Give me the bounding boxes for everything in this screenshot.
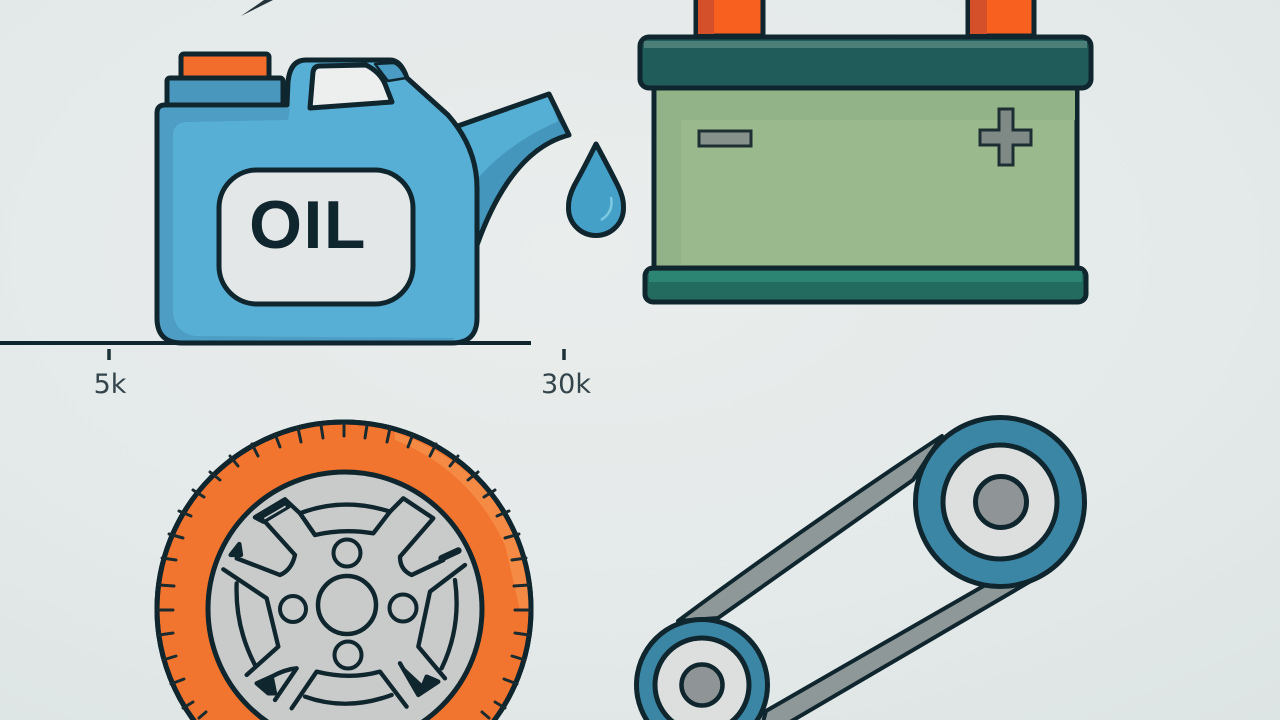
tire outline and tread marks: [157, 422, 531, 720]
battery lid: [640, 37, 1091, 88]
can body outline: [157, 60, 477, 343]
icon: oil can: [157, 54, 569, 343]
rim: [208, 472, 482, 720]
icon: belt and pulleys: [636, 418, 1084, 720]
small pulley: [636, 620, 768, 720]
large pulley: [916, 418, 1084, 586]
can body shading: [159, 108, 455, 342]
battery case: [654, 85, 1077, 270]
stray pen stroke at top: [241, 0, 273, 16]
hub: [318, 576, 376, 634]
belt lower run: [763, 578, 1036, 720]
can body: [157, 60, 477, 343]
plus symbol: [980, 109, 1031, 165]
spokes and windows: [223, 498, 465, 708]
handle tab: [375, 63, 406, 81]
minus symbol: [699, 131, 751, 146]
icon: tire and wheel: [157, 422, 531, 720]
oil label: [219, 170, 413, 304]
icon: car battery: [640, 0, 1091, 302]
battery terminals: [696, 0, 1034, 36]
label: 30k: 30k: [541, 369, 591, 400]
belt upper run: [678, 436, 942, 621]
label: 5k: 5k: [94, 369, 127, 400]
timeline axis with mileage ticks: [0, 343, 591, 400]
can cap: [167, 54, 283, 105]
can handle opening: [310, 65, 392, 108]
can spout: [455, 94, 569, 245]
icon: oil drop: [568, 144, 624, 236]
tire: [157, 422, 531, 720]
bolt holes: [280, 540, 416, 668]
tire highlight: [395, 432, 530, 610]
oil label: OIL: [249, 187, 367, 263]
battery base: [645, 268, 1086, 302]
